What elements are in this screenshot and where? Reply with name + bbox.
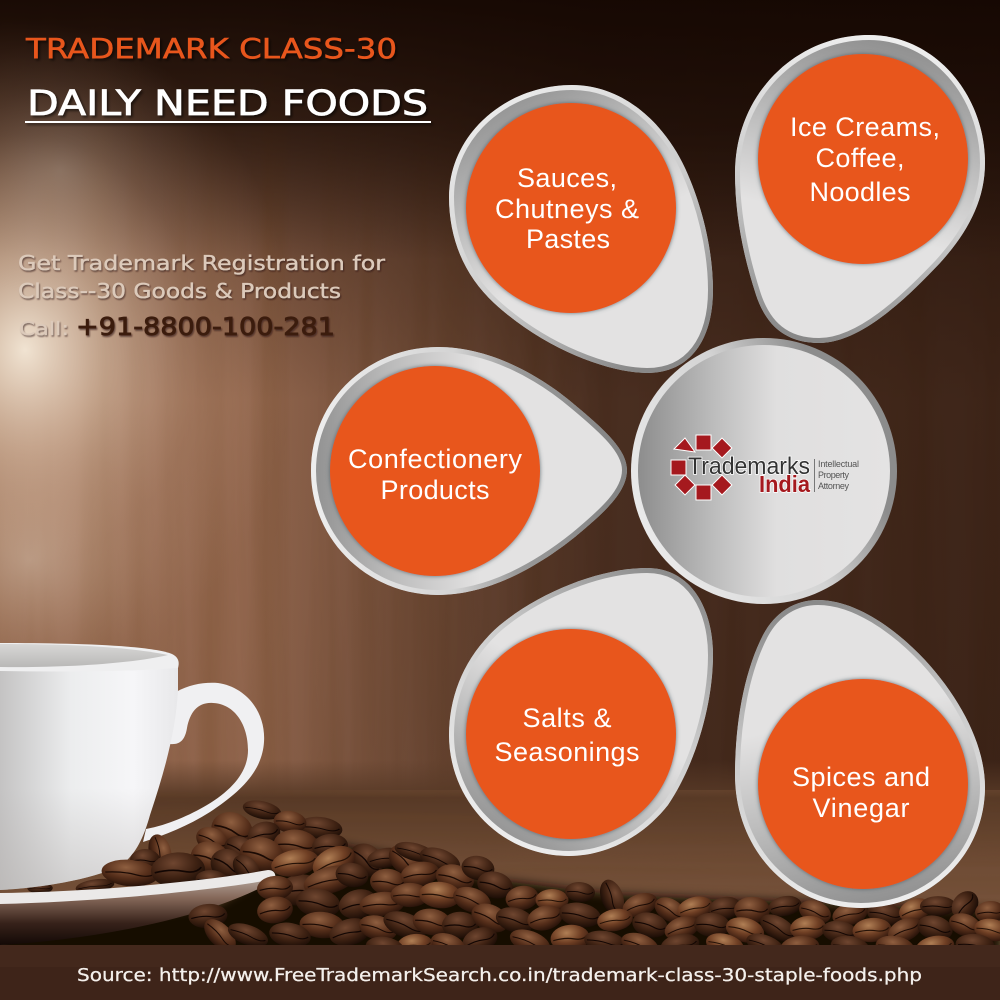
call to action text: Call:: [19, 318, 69, 340]
petal: Salts & Seasonings: Salts &: [522, 703, 612, 733]
logo mark: [671, 435, 732, 500]
call to action text: Get Trademark Registration for: [18, 251, 386, 275]
title: Trademark Class-30: TRADEMARK CLASS-30: [25, 32, 397, 65]
petal: Confectionery Products: Confectionery: [348, 444, 522, 474]
petal: Spices and Vinegar: Spices and: [792, 762, 930, 792]
heading: Daily Need Foods: DAILY NEED FOODS: [27, 84, 428, 124]
coffee bean pile: [188, 837, 1000, 962]
cup handle: [143, 683, 264, 842]
heading underline: [25, 121, 431, 123]
petal: Sauces, Chutneys & Pastes: [449, 85, 713, 373]
petal: Ice Creams, Coffee, Noodles: Noodles: [810, 177, 910, 207]
logo tagline: Intellectual: [818, 459, 859, 469]
logo wordmark: Trademarks: [688, 453, 810, 480]
petal: Ice Creams, Coffee, Noodles: Ice Creams,: [790, 112, 940, 142]
petal: Sauces, Chutneys & Pastes: Chutneys &: [495, 194, 639, 224]
petal: Salts & Seasonings: [449, 568, 713, 856]
logo: Trademarks India: [671, 435, 859, 500]
cup rim and interior: [0, 643, 179, 672]
petal: Ice Creams, Coffee, Noodles: [735, 35, 985, 343]
cup body: [0, 664, 178, 890]
petal: Spices and Vinegar: Vinegar: [812, 793, 910, 823]
logo tagline: Property: [818, 470, 850, 480]
saucer: [0, 870, 275, 945]
call to action text: +91-8800-100-281: [76, 312, 335, 341]
petal: Sauces, Chutneys & Pastes: Sauces,: [517, 163, 617, 193]
logo tagline: Attorney: [818, 481, 850, 491]
beans behind the cup: [0, 845, 1000, 960]
petal: Confectionery Products: Products: [380, 475, 490, 505]
call to action text: Class--30 Goods & Products: [18, 279, 341, 303]
petal: Confectionery Products: [311, 347, 627, 595]
logo: Trademarks India: India: [759, 471, 810, 497]
source text: Source: http://www.FreeTrademarkSearch.co.in/trademark-class-30-staple-foods.php: [77, 966, 922, 986]
source bar: [0, 945, 1000, 1000]
title block: [25, 32, 431, 124]
call to action text: [18, 251, 386, 341]
petal: Ice Creams, Coffee, Noodles: Coffee,: [816, 143, 904, 173]
coffee cup: [0, 643, 264, 890]
petal: Salts & Seasonings: Seasonings: [494, 737, 640, 767]
petal: Spices and Vinegar: [735, 600, 985, 908]
petal: Sauces, Chutneys & Pastes: Pastes: [526, 224, 610, 254]
coffee beans on saucer: [75, 797, 349, 895]
center disc with logo: [631, 338, 897, 604]
